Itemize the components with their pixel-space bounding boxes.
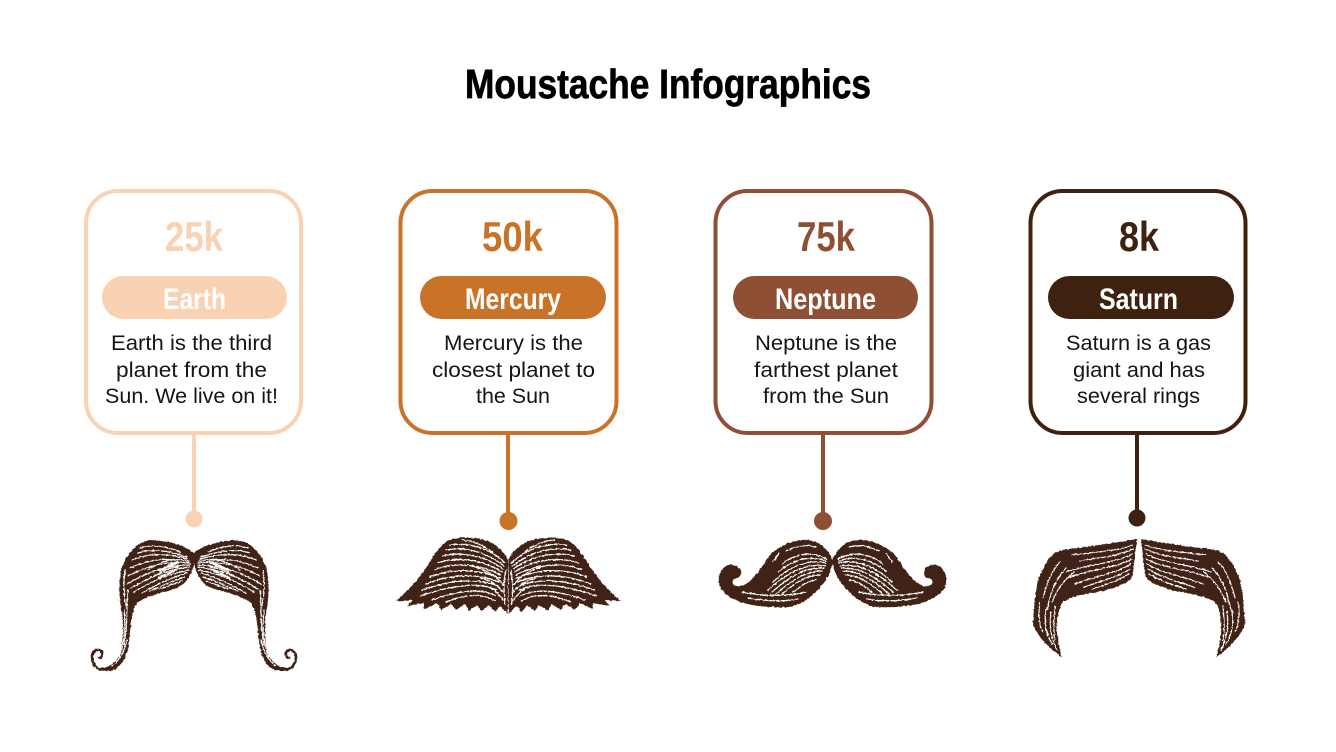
description: Saturn: Saturn is a gas — [1066, 332, 1211, 355]
pill: Mercury: Mercury — [465, 283, 561, 316]
connector: Neptune — [814, 433, 832, 530]
description: Neptune: from the Sun — [763, 385, 889, 408]
pill: Saturn: Saturn — [1099, 283, 1178, 316]
pill: Neptune: Neptune — [775, 283, 876, 316]
connector: Earth — [186, 433, 202, 528]
description: Neptune: Neptune is the — [755, 332, 897, 355]
icon: wide moustache — [396, 537, 621, 614]
pill: Earth: Earth — [163, 283, 226, 316]
panel: Saturn card — [1030, 191, 1246, 433]
description: Mercury: Mercury is the — [444, 332, 583, 355]
icon: handlebar moustache — [719, 540, 946, 607]
description: Saturn — [1066, 332, 1211, 408]
connector: Saturn — [1128, 433, 1146, 526]
title: Moustache Infographics — [465, 61, 871, 107]
icon: curled moustache — [92, 540, 296, 671]
description: Saturn: giant and has — [1073, 359, 1205, 382]
description: Mercury — [432, 332, 595, 408]
panel: Mercury card — [400, 191, 616, 433]
description: Earth: planet from the — [116, 359, 267, 382]
panel: Earth card — [86, 191, 301, 433]
pill: Neptune — [733, 276, 918, 319]
description: Earth: Earth is the third — [111, 332, 272, 355]
value: 25k: 25k — [165, 213, 224, 260]
description: Earth: Sun. We live on it! — [105, 385, 278, 408]
pill: Mercury — [420, 276, 606, 319]
description: Mercury: closest planet to — [432, 359, 595, 382]
icon: horseshoe moustache — [1033, 539, 1245, 657]
panel: Neptune card — [716, 191, 932, 433]
value: 8k: 8k — [1119, 213, 1160, 260]
value: 75k: 75k — [797, 213, 856, 260]
description: Neptune: farthest planet — [754, 359, 898, 382]
description: Earth — [105, 332, 278, 408]
description: Neptune — [754, 332, 898, 408]
pill: Earth — [102, 276, 287, 319]
connector: Mercury — [500, 433, 518, 530]
description: Mercury: the Sun — [476, 385, 550, 408]
pill: Saturn — [1048, 276, 1234, 319]
value: 50k: 50k — [482, 213, 544, 260]
description: Saturn: several rings — [1077, 385, 1200, 408]
